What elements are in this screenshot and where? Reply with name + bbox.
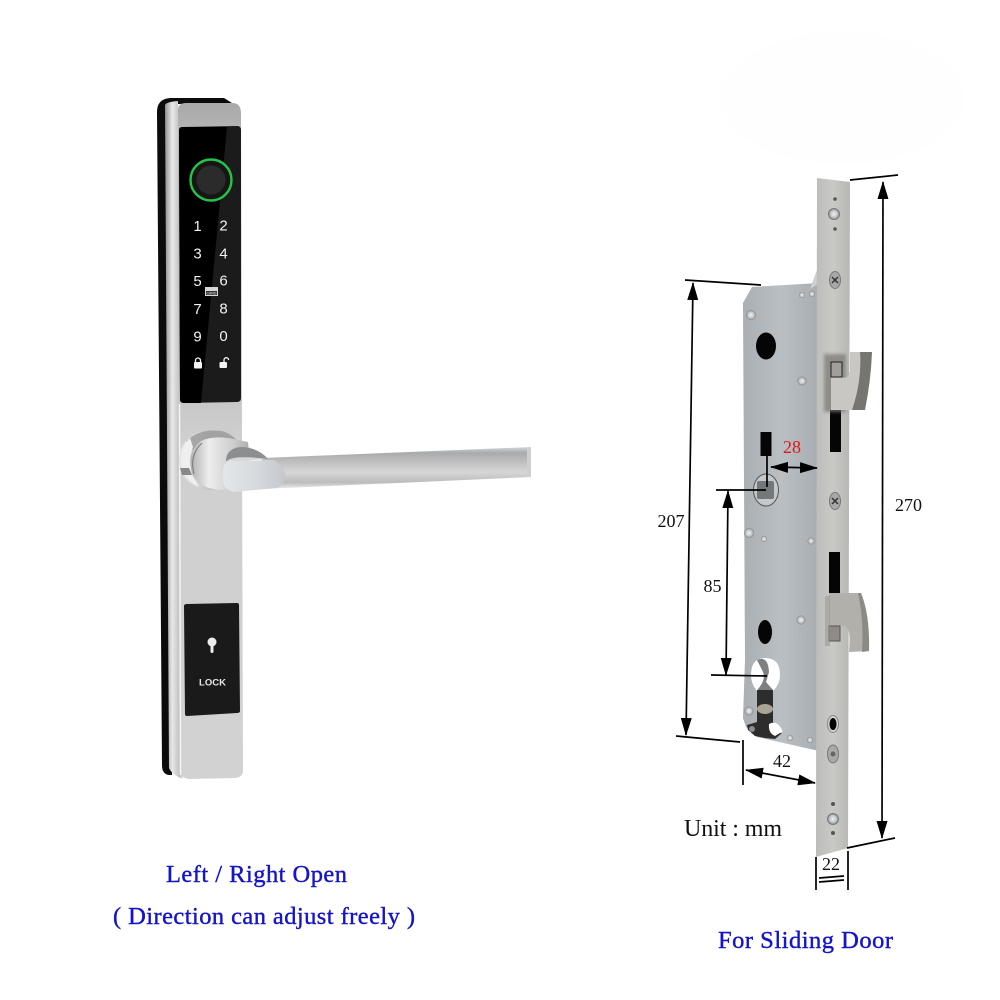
dimension values: 22 bbox=[822, 854, 840, 874]
card reader icon: CARD bbox=[207, 292, 217, 296]
icon: unlock bbox=[220, 358, 229, 368]
black back edge bbox=[157, 98, 232, 775]
smart lock handle product bbox=[157, 98, 531, 779]
caption: direction adjust: ( Direction can adjust freely ) bbox=[113, 903, 415, 930]
collar bbox=[190, 437, 252, 490]
dimension values: 85 bbox=[704, 576, 722, 596]
case rivets bbox=[744, 291, 815, 743]
icon: keyhole bbox=[208, 638, 216, 653]
keypad digits: 9 bbox=[193, 328, 202, 346]
keypad digits: 7 bbox=[193, 301, 202, 318]
faint background smudge bbox=[720, 32, 964, 164]
keypad digits bbox=[193, 218, 228, 346]
caption: left right open: Left / Right Open bbox=[166, 861, 347, 888]
keypad digits: 3 bbox=[193, 246, 202, 262]
207 dimension bbox=[676, 280, 761, 742]
lever neck bbox=[223, 460, 285, 492]
keypad digits: 5 bbox=[193, 273, 202, 290]
28 dimension bbox=[767, 455, 817, 487]
upper hook bolt bbox=[824, 352, 872, 412]
keypad digits: 6 bbox=[219, 272, 228, 290]
keypad panel bbox=[179, 126, 241, 403]
22 dimension bbox=[816, 851, 848, 890]
top wedge bbox=[226, 447, 268, 461]
keypad digits: 8 bbox=[219, 300, 228, 318]
lock case bbox=[743, 283, 819, 751]
270 dimension bbox=[847, 175, 898, 848]
dimension values: 42 bbox=[773, 751, 791, 771]
key lock panel bbox=[184, 603, 240, 716]
dimension values: 270 bbox=[895, 495, 922, 515]
fingerprint sensor ring bbox=[190, 160, 232, 200]
card reader icon bbox=[205, 287, 218, 296]
lever bar bbox=[262, 447, 531, 489]
keypad digits: 0 bbox=[219, 328, 228, 345]
dimension values: 207 bbox=[658, 511, 684, 531]
highlighted dimension value: 28 bbox=[783, 437, 801, 457]
42 dimension bbox=[743, 740, 815, 785]
dimension values bbox=[658, 495, 922, 874]
silver side edge bbox=[165, 101, 183, 779]
dimension lines bbox=[676, 175, 898, 890]
lower bolt slot bbox=[829, 552, 840, 594]
mortise lock diagram bbox=[658, 175, 922, 890]
caption: sliding door: For Sliding Door bbox=[718, 927, 893, 954]
face plate fixings bbox=[828, 197, 840, 835]
lock label: LOCK bbox=[199, 678, 226, 688]
front face plate bbox=[178, 103, 243, 779]
upper bolt slot bbox=[830, 410, 841, 452]
rose bbox=[179, 430, 239, 490]
icon: lock bbox=[194, 358, 202, 368]
euro cylinder cutout bbox=[747, 658, 782, 739]
keypad digits: 4 bbox=[219, 246, 228, 262]
lower hook bolt bbox=[825, 593, 869, 652]
keypad digits: 2 bbox=[219, 218, 228, 234]
85 dimension bbox=[711, 490, 767, 676]
unit note: Unit : mm bbox=[684, 816, 782, 842]
case holes bbox=[747, 332, 782, 739]
lever handle bbox=[179, 430, 531, 492]
face plate bbox=[816, 178, 850, 857]
keypad digits: 1 bbox=[193, 218, 202, 235]
